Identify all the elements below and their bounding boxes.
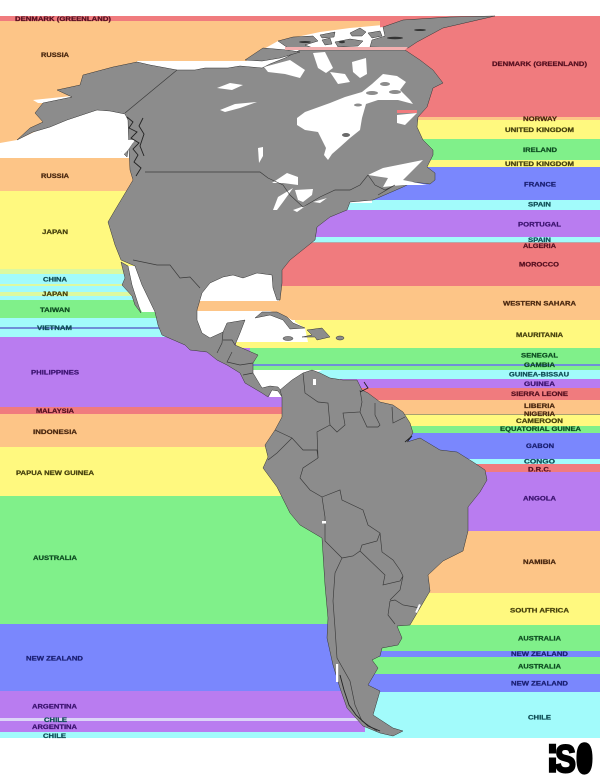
label: Japan south: JAPAN: [42, 291, 68, 298]
small dark and grey island details: [299, 29, 426, 137]
land: North and Central America: [17, 16, 495, 397]
label: Gabon: GABON: [526, 443, 554, 450]
label: United Kingdom north: UNITED KINGDOM: [505, 127, 575, 134]
label: Congo: CONGO: [524, 459, 555, 466]
label: United Kingdom south: UNITED KINGDOM: [505, 161, 575, 168]
Arctic islands: small lumps: [320, 28, 382, 47]
label: Indonesia: INDONESIA: [33, 429, 77, 436]
label: Argentina south: ARGENTINA: [32, 724, 77, 731]
label: Australia south: AUSTRALIA: [518, 664, 561, 671]
top band: Denmark strip: [0, 16, 600, 21]
Baja California: [121, 262, 141, 313]
label: Spain south: SPAIN: [528, 237, 551, 244]
label: New Zealand south: NEW ZEALAND: [511, 681, 568, 688]
left latitude bands: Pacific side: [0, 21, 388, 738]
label: Namibia: NAMIBIA: [523, 559, 556, 566]
label: New Zealand north: NEW ZEALAND: [511, 651, 568, 658]
label: Malaysia: MALAYSIA: [36, 408, 74, 415]
land: South America: [263, 370, 487, 736]
coastal fjord detail: [127, 117, 412, 731]
label: Russia north: RUSSIA: [41, 52, 69, 59]
label: Taiwan: TAIWAN: [40, 307, 70, 314]
Arctic island: north-east strip: [370, 16, 495, 48]
Puerto Rico: [336, 336, 344, 340]
Cuba: [255, 312, 305, 329]
left country labels: [15, 16, 111, 740]
label: Portugal: PORTUGAL: [518, 222, 561, 229]
label: Spain north: SPAIN: [528, 202, 551, 209]
label: Argentina north: ARGENTINA: [32, 704, 77, 711]
logo: ISO: [546, 735, 593, 778]
label: Norway: NORWAY: [523, 116, 558, 123]
label: Russia south: RUSSIA: [41, 173, 69, 180]
label: Guinea: GUINEA: [524, 381, 555, 388]
label: Vietnam: VIETNAM: [37, 325, 73, 332]
label: Western Sahara: WESTERN SAHARA: [503, 301, 576, 308]
Arctic and Hudson Bay water: [122, 52, 427, 212]
label: Australia: AUSTRALIA: [33, 555, 77, 562]
right latitude bands: Atlantic side: [197, 21, 600, 738]
unclaimed water: white areas: [0, 27, 390, 397]
label: Equatorial Guinea: EQUATORIAL GUINEA: [500, 426, 581, 433]
Vancouver Island: [122, 143, 133, 157]
country borders: [125, 70, 420, 731]
label: Philippines: PHILIPPINES: [31, 370, 80, 377]
label: Liberia: LIBERIA: [524, 403, 555, 410]
label: South Africa: SOUTH AFRICA: [510, 608, 569, 615]
label: Gambia: GAMBIA: [524, 362, 555, 369]
label: Nigeria: NIGERIA: [524, 411, 555, 418]
label: France: FRANCE: [524, 182, 557, 189]
label: Chile south: CHILE: [43, 733, 67, 740]
label: Senegal: SENEGAL: [521, 353, 558, 360]
label: Angola: ANGOLA: [523, 496, 556, 503]
label: Cameroon: CAMEROON: [516, 418, 563, 425]
Jamaica: [283, 336, 293, 340]
label: Morocco: MOROCCO: [519, 262, 559, 269]
label: Australia north: AUSTRALIA: [518, 636, 561, 643]
Baffin shelf island: [245, 48, 300, 61]
label: Guinea-Bissau: GUINEA-BISSAU: [509, 372, 569, 379]
label: Papua New Guinea: PAPUA NEW GUINEA: [16, 470, 94, 477]
label: New Zealand: NEW ZEALAND: [26, 656, 83, 663]
Arctic island: west lump: [278, 36, 318, 48]
label: Chile right: CHILE: [528, 715, 552, 722]
label: D.R.C.: D.R.C.: [528, 467, 551, 474]
white specks in southern Chile and Brazil: [313, 379, 421, 682]
label: Mauritania: MAURITANIA: [516, 332, 563, 339]
label: Denmark (Greenland) left: DENMARK (GREENLAND): [15, 16, 111, 23]
label: Sierra Leone: SIERRA LEONE: [511, 391, 569, 398]
right country labels: [492, 61, 587, 722]
label: Chile north: CHILE: [44, 717, 68, 724]
label: Japan north: JAPAN: [42, 229, 68, 236]
label: Ireland: IRELAND: [523, 147, 557, 154]
label: Algeria: ALGERIA: [523, 243, 556, 250]
label: Denmark (Greenland) right: DENMARK (GREENLAND): [492, 61, 587, 68]
Hispaniola: [302, 328, 330, 340]
red strip across the Arctic: [285, 47, 408, 50]
label: China: CHINA: [43, 277, 67, 284]
